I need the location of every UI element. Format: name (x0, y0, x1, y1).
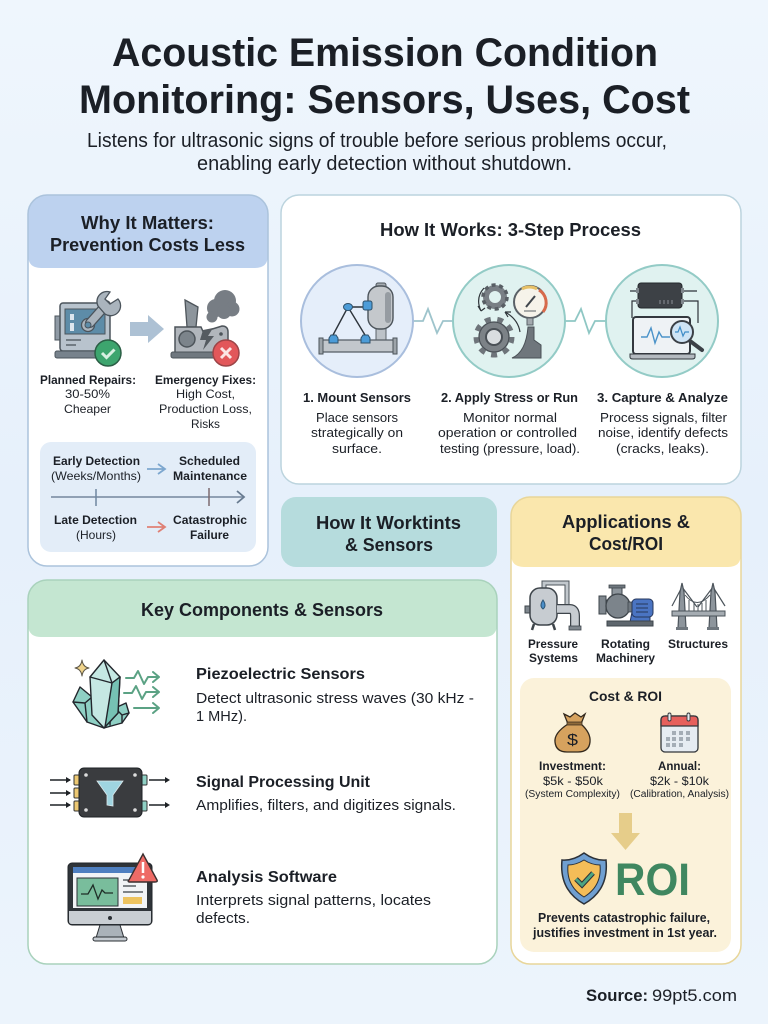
text: planned repairs: Cheaper (64, 402, 111, 416)
step 2 text: operation or controlled (438, 426, 577, 440)
icon: analysis software monitor (68, 854, 157, 941)
timeline box: Failure (190, 528, 229, 542)
text: annual: Annual: (658, 759, 701, 773)
icon: shield (562, 853, 606, 904)
timeline box: (Hours) (76, 528, 116, 542)
text: analysis software: defects. (196, 911, 250, 927)
text: roi description: Prevents catastrophic failure, (538, 911, 710, 925)
text: signal processing unit: Signal Processing Unit (196, 774, 371, 791)
text: analysis software: Analysis Software (196, 869, 337, 886)
heading: applications (562, 511, 690, 554)
step 2 text: testing (pressure, load). (440, 442, 580, 456)
text: piezoelectric sensors: Piezoelectric Sensors (196, 666, 365, 683)
panel: why it matters (28, 195, 268, 566)
label: pressure systems (528, 637, 578, 665)
connector: step 1 to 2 (413, 309, 453, 333)
step 1 text: strategically on (311, 426, 403, 440)
step 2 text: Monitor normal (463, 411, 557, 425)
timeline box: Catastrophic (173, 513, 247, 527)
source (586, 987, 737, 1005)
text: emergency fixes: Emergency Fixes: (155, 373, 256, 387)
timeline box: Scheduled (179, 454, 240, 468)
step 3 text: 3. Capture & Analyze (597, 390, 728, 405)
text: signal processing unit (196, 774, 456, 814)
step 2 text: 2. Apply Stress or Run (441, 390, 578, 405)
subtitle (87, 130, 667, 175)
label: pressure systems: Systems (529, 651, 578, 665)
timeline arrow (51, 488, 244, 506)
heading: cost and roi: Cost & ROI (589, 688, 662, 704)
subtitle: Listens for ultrasonic signs of trouble before serious problems occur, (87, 130, 667, 152)
arrow: planned to emergency (130, 315, 164, 343)
text: investment: Investment: (539, 759, 606, 773)
text: emergency fixes: Risks (191, 417, 220, 431)
heading: why it matters: Why It Matters: (81, 213, 214, 233)
step 1 text (303, 390, 411, 456)
box: cost and roi (520, 678, 731, 952)
icon: broken machine (171, 290, 240, 366)
step 1 text: surface. (332, 442, 382, 456)
text: analysis software (196, 869, 431, 927)
text: investment: $5k - $50k (543, 774, 604, 788)
label: rotating machinery (596, 637, 655, 665)
title (79, 31, 690, 122)
heading: applications: Cost/ROI (589, 533, 663, 554)
text: annual (630, 759, 729, 800)
source: Source: (586, 987, 648, 1005)
text: planned repairs: Planned Repairs: (40, 373, 136, 387)
heading: why it matters (50, 213, 245, 255)
timeline box: Maintenance (173, 469, 247, 483)
timeline box: Early Detection (53, 454, 140, 468)
icon: rotating machinery (599, 585, 653, 626)
icon: mount sensors (301, 265, 413, 377)
text: analysis software: Interprets signal patterns, locates (196, 893, 431, 909)
heading: key components: Key Components & Sensors (141, 599, 383, 620)
heading: why it matters: Prevention Costs Less (50, 235, 245, 255)
icon: signal processing chip (50, 768, 170, 817)
heading: applications: Applications & (562, 511, 690, 532)
text: emergency fixes: Production Loss, (159, 402, 252, 416)
icon: money bag (555, 713, 590, 752)
text: annual: $2k - $10k (650, 774, 710, 788)
roi label: ROI (615, 854, 690, 905)
text: planned repairs: 30-50% (65, 387, 110, 401)
connector: step 2 to 3 (565, 309, 606, 333)
icon: money bag: $ (567, 732, 578, 749)
text: annual: (Calibration, Analysis) (630, 789, 729, 800)
step 2 text (438, 390, 580, 456)
label: rotating machinery: Machinery (596, 651, 655, 665)
arrow: cost to roi (611, 813, 640, 850)
text: emergency fixes (155, 373, 256, 431)
step 1 text: 1. Mount Sensors (303, 390, 411, 405)
source: 99pt5.com (652, 987, 737, 1005)
panel: applications and cost (511, 497, 741, 964)
section label: how it works and sensors (281, 497, 497, 567)
title: Monitoring: Sensors, Uses, Cost (79, 78, 690, 122)
text: emergency fixes: High Cost, (176, 387, 235, 401)
arrow: late to failure (147, 522, 165, 532)
icon: capture and analyze (606, 265, 718, 377)
text: roi description: justifies investment in 1st year. (532, 926, 717, 940)
text: roi description (532, 911, 717, 940)
heading: how it works: How It Works: 3-Step Process (380, 219, 641, 240)
icon: apply stress (453, 265, 565, 377)
label: pressure systems: Pressure (528, 637, 578, 651)
step 3 text: Process signals, filter (600, 411, 727, 425)
icon: calendar (661, 713, 698, 752)
subtitle: enabling early detection without shutdown. (197, 153, 572, 175)
section label: how it works and sensors: & Sensors (345, 534, 433, 555)
icon: planned repair computer (55, 292, 121, 366)
text: investment: (System Complexity) (525, 789, 620, 800)
text: planned repairs (40, 373, 136, 416)
panel: how it works (281, 195, 741, 484)
text: investment (525, 759, 620, 800)
timeline box: (Weeks/Months) (51, 469, 141, 483)
icon: pressure system (525, 583, 581, 630)
arrow: early to scheduled (147, 464, 165, 474)
title: Acoustic Emission Condition (112, 31, 658, 75)
step 3 text (597, 390, 728, 456)
panel: key components (28, 580, 497, 964)
text: signal processing unit: Amplifies, filters, and digitizes signals. (196, 798, 456, 814)
section label: how it works and sensors: How It Worktints (316, 512, 461, 533)
icon: bridge (672, 583, 725, 630)
label: rotating machinery: Rotating (601, 637, 650, 651)
step 3 text: (cracks, leaks). (616, 442, 709, 456)
text: piezoelectric sensors (196, 666, 474, 725)
label: structures: Structures (668, 637, 728, 651)
step 3 text: noise, identify defects (598, 426, 728, 440)
timeline box (40, 442, 256, 552)
text: piezoelectric sensors: 1 MHz). (196, 709, 247, 725)
icon: crystal (73, 660, 159, 728)
text: piezoelectric sensors: Detect ultrasonic stress waves (30 kHz - (196, 691, 474, 707)
step 1 text: Place sensors (316, 411, 398, 425)
timeline box: Late Detection (54, 513, 137, 527)
